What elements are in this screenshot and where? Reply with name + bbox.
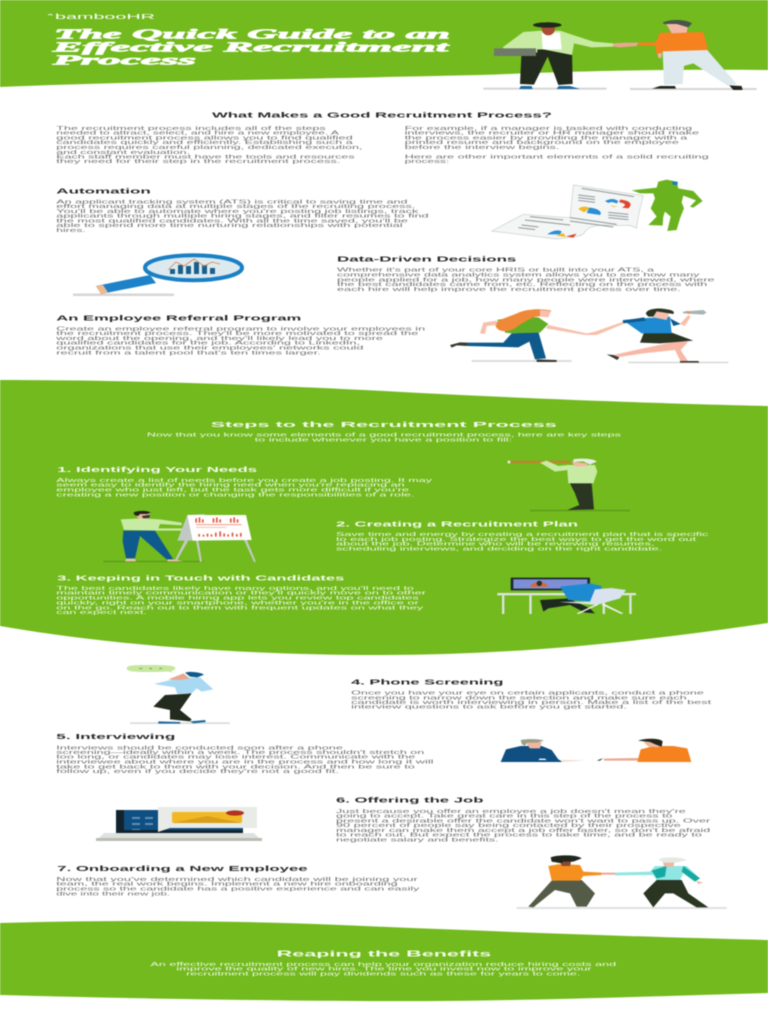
intro text: right column: the process easier by providing the manager with a: [405, 136, 687, 142]
intro text: right column: interviews, the recruiter or HR manager should make: [405, 130, 699, 136]
text: An Employee Referral Program: the recruitment process. They'll be more motivated to spread the: [56, 331, 419, 337]
text: step 3: [56, 586, 427, 616]
text: An Employee Referral Program: Create an employee referral program to involve your employees in: [56, 326, 425, 332]
text: step 6: negotiate salary and benefits.: [336, 837, 499, 843]
text: Automation: applicants through multiple hiring stages, and filter resumes to find: [56, 213, 429, 219]
heading: step 7: 7. Onboarding a New Employee: [57, 864, 308, 873]
text: step 5: [56, 745, 434, 775]
text: closing paragraph: [150, 962, 616, 977]
text: step 4: [351, 691, 713, 711]
text: step 7: Now that you've determined which candidate will be joining your: [56, 877, 418, 883]
intro text: right column: process:: [405, 159, 449, 165]
intro text: left column: they need for their step in the recruitment process.: [56, 159, 340, 165]
text: step 3: The best candidates likely have many options, and you'll need to: [56, 586, 414, 592]
illustration: person with telescope: [508, 459, 630, 511]
logo: bambooHR: [55, 14, 155, 21]
text: step 2: scheduling interviews, and deciding on the right candidate.: [336, 546, 662, 552]
text: step 5: interviewee about where you are in the process and how long it will: [56, 759, 434, 765]
illustration: laptop with email notification: [96, 807, 262, 841]
text: Automation: hires.: [56, 228, 86, 234]
intro text: left column: good recruitment process allows you to find qualified: [56, 136, 353, 142]
intro text: right column: [405, 126, 709, 165]
heading: step 5: 5. Interviewing: [56, 732, 176, 741]
text: step 2: to each job posting. Strategize the best ways to get the word out: [336, 537, 697, 543]
text: step 6: manager can make them accept a job offer faster, so don't be afraid: [336, 828, 710, 834]
text: step 7: team, the real work begins. Implement a new hire onboarding: [56, 882, 398, 888]
text: step 5: too long, or candidates may lose interest. Communicate with the: [56, 755, 416, 761]
text: An Employee Referral Program: [56, 326, 425, 356]
text: Automation: the most qualified candidates. With all the time saved, you'll be: [56, 218, 408, 224]
text: step 5: follow up, even if you decide they're not a good fit.: [56, 769, 339, 775]
text: Data-Driven Decisions: the best candidates came from, etc. Reflecting on the process with: [337, 282, 708, 288]
section heading: What Makes a Good Recruitment Process?: What Makes a Good Recruitment Process?: [212, 110, 553, 120]
intro text: right column: before the interview begins.: [405, 145, 559, 151]
text: Automation: able to spend more time nurturing relationships with potential: [56, 223, 403, 229]
text: step 7: process so the candidate has a positive experience and can easily: [56, 887, 420, 893]
text: step 1: creating a new position or changing the responsibilities of a role.: [56, 492, 414, 498]
text: closing paragraph: An effective recruitment process can help your organization reduce hiring costs and: [150, 962, 616, 968]
illustration: person at flip chart: [103, 511, 256, 562]
text: step 5: take to get back to them with your decision. And then be sure to: [56, 764, 415, 770]
text: step 2: [336, 532, 709, 552]
heading: step 2: 2. Creating a Recruitment Plan: [336, 520, 579, 528]
title: [50, 28, 451, 68]
intro text: right column: Here are other important elements of a solid recruiting: [405, 154, 709, 160]
text: step 6: 90 percent of people say being contacted by their prospective: [336, 823, 681, 829]
illustration: onboarding handshake: [517, 855, 727, 909]
intro text: left column: The recruitment process includes all of the steps: [56, 126, 327, 132]
text: step 6: to reach out. But expect the process to take time, and be ready to: [336, 833, 702, 839]
intro text: steps: [147, 433, 622, 444]
illustration: interview across table: [501, 739, 691, 762]
text: step 7: dive into their new job.: [56, 891, 170, 897]
header green band: [0, 0, 768, 87]
text: Data-Driven Decisions: comprehensive data analytics system allows you to see how many: [337, 273, 700, 279]
text: step 1: [56, 478, 433, 498]
text: step 4: Once you have your eye on certain applicants, conduct a phone: [351, 691, 704, 697]
text: closing paragraph: recruitment process will pay dividends such as these for years to come.: [186, 971, 580, 977]
text: An Employee Referral Program: qualified candidates for the job. According to LinkedIn,: [56, 341, 360, 347]
title: Process: [53, 54, 198, 68]
text: step 1: employee who just left, but the task gets more difficult if you're: [56, 488, 409, 494]
text: step 3: opportunities. A mobile hiring app lets you review top candidates: [56, 596, 420, 602]
text: step 2: about the job. Determine who will be reviewing resumes,: [336, 542, 654, 548]
text: step 3: can expect next.: [56, 610, 147, 616]
text: step 6: present a desirable offer the candidate won't want to pass up. Over: [336, 818, 711, 824]
closing green band: [0, 921, 768, 1001]
intro text: right column: For example, if a manager is tasked with conducting: [405, 126, 692, 132]
intro text: left column: Each staff member must have the tools and resources: [56, 154, 356, 160]
text: Automation: [56, 199, 429, 234]
text: step 5: screening—ideally within a week. The process shouldn't stretch on: [56, 750, 424, 756]
intro text: left column: candidates quickly and efficiently. Establishing such a: [56, 140, 353, 146]
text: Data-Driven Decisions: Whether it's part of your core HRIS or built into your ATS, a: [337, 268, 654, 274]
illustration: magnifier with chart: [73, 255, 242, 296]
text: Data-Driven Decisions: [337, 268, 715, 293]
text: step 4: interview questions to ask before you get started.: [351, 705, 627, 711]
illustration: two women holding hands: [450, 309, 728, 363]
text: Automation: You'll be able to automate where you're posting job listings, track: [56, 209, 419, 215]
text: step 4: candidate is worth interviewing in person. Make a list of the best: [351, 700, 713, 706]
heading: Data-Driven Decisions: Data-Driven Decisions: [337, 255, 516, 264]
logo: [48, 14, 155, 21]
text: step 3: maintain timely communication or they'll quickly move on to other: [56, 591, 427, 597]
text: step 2: Save time and energy by creating a recruitment plan that is specific: [336, 532, 709, 538]
text: Automation: An applicant tracking system (ATS) is critical to saving time and: [56, 199, 408, 205]
intro text: left column: process requires careful planning, dedicated execution,: [56, 145, 362, 151]
heading: Automation: Automation: [56, 186, 152, 195]
heading: Steps to the Recruitment Process: Steps to the Recruitment Process: [211, 420, 557, 429]
text: step 6: [336, 809, 711, 843]
title: Effective Recruitment: [50, 40, 451, 56]
text: step 3: on the go. Reach out to them with frequent updates on what they: [56, 605, 424, 611]
text: Automation: effort managing data at multiple stages of the recruiting process.: [56, 204, 415, 210]
text: step 7: [56, 877, 420, 897]
text: An Employee Referral Program: organizations that use their employees' networks could: [56, 345, 364, 351]
heading: step 6: 6. Offering the Job: [336, 796, 484, 805]
text: step 6: going to accept. Take great care in this step of the process to: [336, 814, 673, 820]
text: step 1: seem easy to identify the hiring need when you're replacing an: [56, 483, 405, 489]
heading: step 3: 3. Keeping in Touch with Candidates: [57, 574, 344, 582]
intro text: left column: and constant evaluation.: [56, 150, 190, 156]
intro text: left column: [56, 126, 362, 165]
heading: step 1: 1. Identifying Your Needs: [57, 465, 257, 474]
title: The Quick Guide to an: [54, 28, 451, 42]
text: Data-Driven Decisions: each hire will help improve the recruitment process over time.: [337, 287, 681, 293]
illustration: person on phone: [127, 665, 230, 724]
intro text: right column: printed resume and background on the employee: [405, 140, 679, 146]
text: step 6: Just because you offer an employee a job doesn't mean they're: [336, 809, 686, 815]
steps green band: [0, 380, 768, 655]
intro text: steps: Now that you know some elements of a good recruitment process, here are key steps: [147, 433, 622, 439]
illustration: handshake: [483, 20, 757, 90]
text: closing paragraph: improve the quality of new hires. The time you invest now to improve your: [176, 967, 592, 973]
text: Data-Driven Decisions: people applied for a job, how many people were interviewed, where: [337, 277, 715, 283]
heading: step 4: 4. Phone Screening: [351, 678, 505, 686]
text: step 1: Always create a list of needs before you create a job posting. It may: [56, 478, 433, 484]
text: step 4: screening to narrow down the selection and make sure each: [351, 695, 687, 701]
illustration: robot and report: [492, 180, 703, 239]
heading: An Employee Referral Program: An Employee Referral Program: [56, 313, 302, 322]
text: An Employee Referral Program: word about the opening, and they'll likely lead you to more: [56, 336, 383, 342]
text: step 5: Interviews should be conducted soon after a phone: [56, 745, 343, 751]
heading: Reaping the Benefits: Reaping the Benefits: [277, 948, 492, 958]
intro text: left column: needed to attract, select, and hire a new employee. A: [56, 130, 340, 136]
intro text: steps: to include whenever you have a position to fill:: [255, 438, 512, 444]
text: An Employee Referral Program: recruit from a talent pool that's ten times larger.: [56, 350, 321, 356]
text: step 3: quickly, right on your smartphone, whether you're in the office or: [56, 600, 419, 606]
illustration: person at desk: [497, 578, 636, 614]
